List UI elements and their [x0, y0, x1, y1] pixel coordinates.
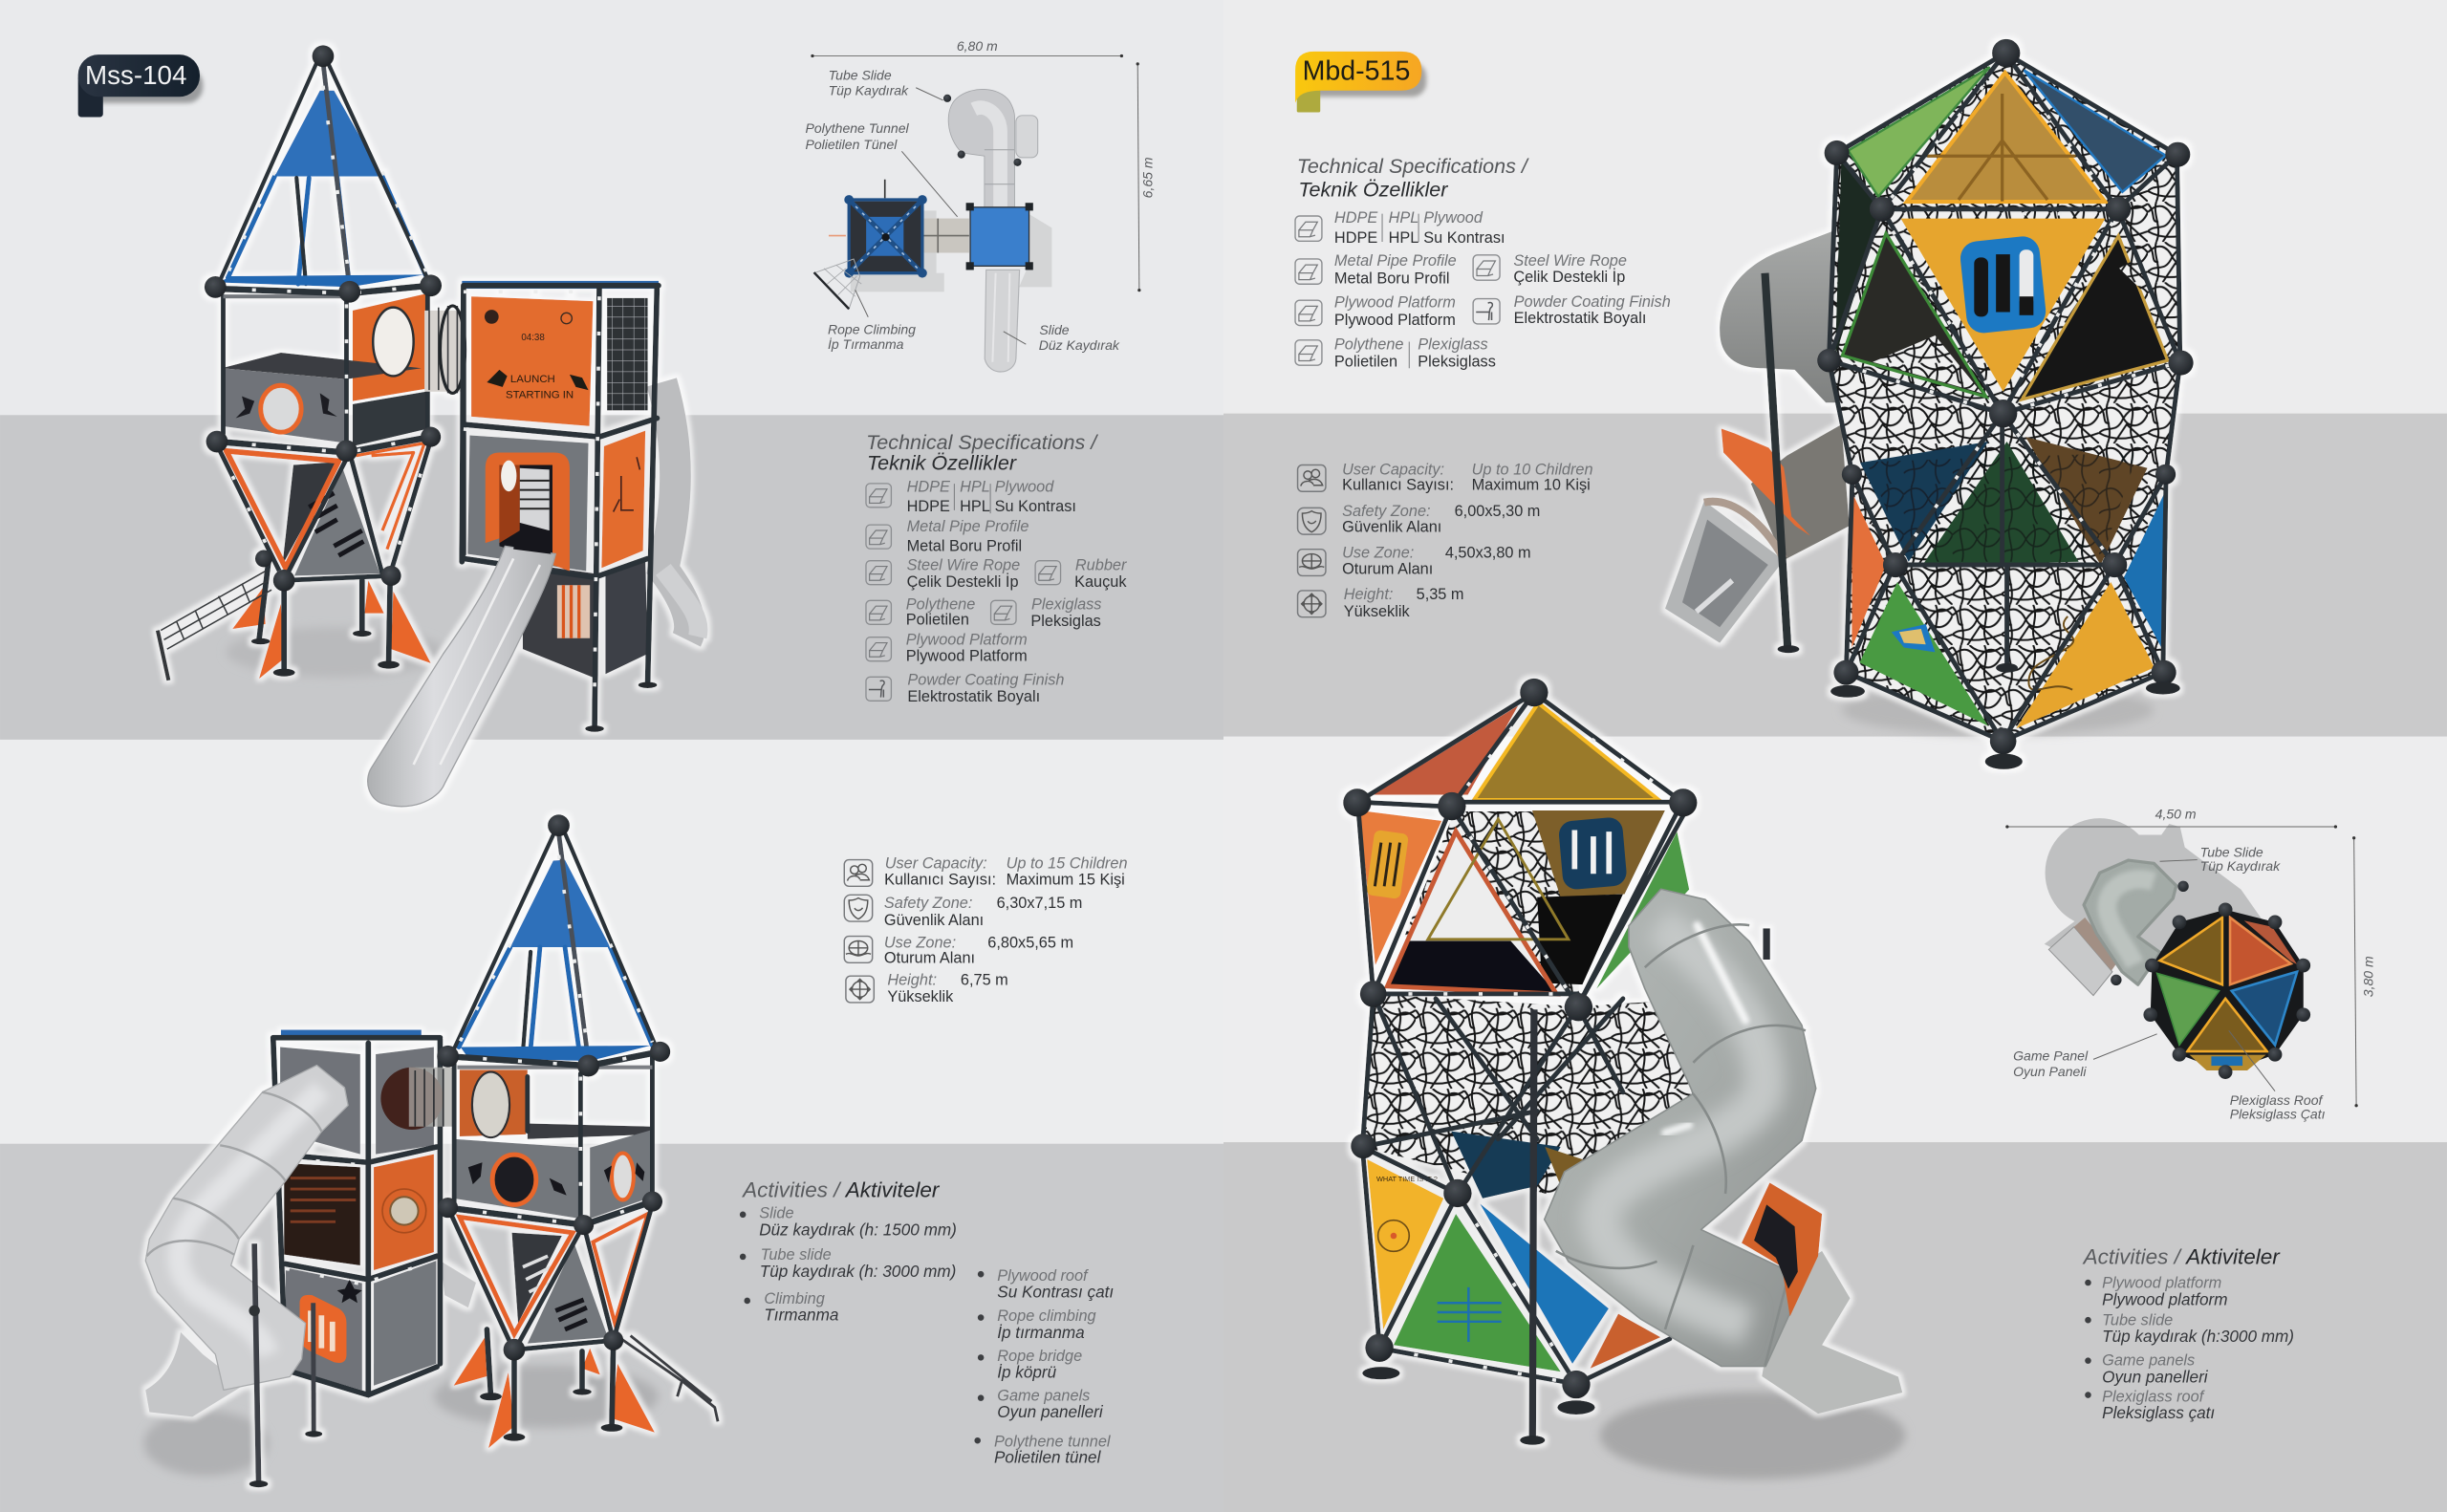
use zone: 4,50x3,80 m	[1445, 545, 1531, 562]
spec: steel wire rope: Steel Wire Rope	[907, 557, 1020, 574]
dome feet	[1362, 1367, 1595, 1415]
plan shadows	[851, 210, 1051, 292]
spec: plexiglass	[1030, 595, 1101, 630]
support post	[1765, 273, 1799, 653]
spec: HDPE HPL plywood: HPL	[1389, 229, 1418, 247]
activities column 2: Rope climbing	[997, 1307, 1096, 1325]
spec: plywood platform: Plywood Platform	[1334, 294, 1456, 312]
activities column 2: Rope bridge	[997, 1348, 1082, 1365]
activities list: Tube slide	[2102, 1311, 2173, 1328]
specifications heading: Technical Specifications /	[1297, 154, 1529, 178]
icon: material	[1473, 255, 1500, 280]
use zone: Use Zone:	[1342, 545, 1414, 562]
dome net	[1362, 994, 1701, 1201]
spec: powder coating: Elektrostatik Boyalı	[1514, 310, 1646, 327]
ground shadow	[227, 627, 444, 678]
plan labels: İp Tırmanma	[828, 336, 904, 352]
spec: polythene	[906, 595, 975, 628]
spec: HDPE HPL plywood: Su Kontrası	[1423, 229, 1505, 247]
bullets column 2	[974, 1271, 984, 1443]
plan labels: Pleksiglass Çatı	[2230, 1107, 2326, 1122]
icon: material	[866, 637, 891, 661]
model badge: Mbd-515	[1295, 52, 1426, 113]
activities column 1: Tırmanma	[764, 1306, 838, 1325]
spec: powder coating: Powder Coating Finish	[907, 672, 1065, 689]
activities heading: Activities / Aktiviteler	[2082, 1244, 2281, 1268]
icon: height	[1298, 591, 1326, 617]
safety zone: Safety Zone:	[1342, 503, 1431, 520]
activities list: Game panels	[2102, 1352, 2195, 1370]
dome panels	[1359, 702, 1689, 1372]
dome nodes	[1817, 39, 2194, 754]
tube slide behind tower	[661, 382, 699, 639]
specifications heading: Teknik Özellikler	[1298, 177, 1448, 201]
ground shadow	[1842, 685, 2154, 735]
icon: user capacity	[1298, 465, 1326, 491]
activities column 2: İp tırmanma	[997, 1323, 1085, 1342]
usage data: Mss-104	[844, 854, 1128, 1005]
orange seat panel	[1742, 1183, 1822, 1316]
spec: polythene plexiglass: Polietilen	[1334, 354, 1397, 371]
icon: safety zone	[844, 895, 873, 921]
spec: steel wire rope	[1513, 252, 1627, 286]
spec: HDPE HPL plywood: Plywood	[995, 478, 1054, 495]
dimension: depth: 6,65 m	[1140, 157, 1156, 198]
usage data: Mbd-515	[1298, 461, 1593, 620]
model badge: Mss-104	[78, 54, 203, 117]
height: Yükseklik	[887, 988, 954, 1005]
spec: powder coating	[1514, 293, 1671, 327]
activities list: Tüp kaydırak (h:3000 mm)	[2102, 1327, 2294, 1346]
activities list: Plywood platform	[2102, 1275, 2221, 1292]
safety zone: Güvenlik Alanı	[1342, 518, 1441, 535]
icon: material	[1295, 340, 1322, 365]
rear tower	[273, 1030, 456, 1395]
spec: polythene plexiglass: Plexiglass	[1418, 336, 1488, 354]
rigging clips	[1829, 59, 2180, 565]
model badge: Mss-104: Mss-104	[85, 60, 186, 90]
icon: powder coating	[866, 677, 891, 701]
orange sign	[1722, 428, 1810, 536]
tower: STARTING IN	[506, 389, 574, 400]
icon: safety zone	[1298, 508, 1326, 534]
rocket cone	[219, 62, 429, 289]
user capacity	[884, 854, 1128, 889]
spec: HDPE HPL plywood: HDPE	[1334, 209, 1378, 227]
rear straight slide	[440, 1261, 476, 1307]
safety zone	[884, 895, 1082, 929]
activities column 2: Su Kontrası çatı	[997, 1283, 1114, 1302]
use zone: Oturum Alanı	[884, 949, 975, 966]
activities column 1: Tube slide	[761, 1246, 832, 1264]
icon: material	[866, 561, 891, 585]
plan labels: Polietilen Tünel	[805, 137, 898, 152]
icon: material	[866, 600, 891, 624]
specifications heading: Teknik Özellikler	[867, 450, 1017, 474]
plan labels: Game Panel	[2013, 1048, 2089, 1063]
dome panels	[1835, 67, 2173, 728]
dome nodes	[1343, 679, 1697, 1398]
use zone: 6,80x5,65 m	[987, 935, 1073, 952]
spec: metal pipe: Metal Pipe Profile	[907, 518, 1029, 535]
plan labels: Slide	[1039, 322, 1070, 337]
icon: powder coating	[1473, 299, 1500, 324]
safety zone: 6,00x5,30 m	[1455, 503, 1540, 520]
icon: user capacity	[844, 860, 873, 886]
slide exit	[1665, 501, 1784, 643]
height: Yükseklik	[1344, 603, 1410, 620]
dimension: width: 6,80 m	[957, 38, 998, 54]
activities column 1: Slide	[759, 1204, 794, 1221]
activities: Mbd-515	[2082, 1244, 2294, 1422]
spec: HDPE HPL plywood	[907, 478, 1076, 515]
product illustration: geodesic climbing dome, view two	[1343, 679, 1905, 1480]
spec: plexiglass: Plexiglass	[1031, 595, 1101, 613]
ground shadow	[1599, 1392, 1905, 1480]
product illustration: rocket play tower, front view	[158, 45, 699, 807]
spec: polythene: Polythene	[906, 595, 975, 613]
user capacity: Maximum 10 Kişi	[1472, 477, 1591, 494]
rear view structure	[145, 814, 718, 1487]
spec: powder coating: Powder Coating Finish	[1514, 293, 1671, 311]
dimension: depth	[1137, 62, 1156, 292]
dome feet	[1830, 663, 2180, 769]
spec: steel wire rope: Çelik Destekli İp	[1513, 268, 1625, 286]
dome two structure	[1343, 679, 1902, 1445]
icon: material	[866, 484, 891, 508]
height	[887, 972, 1008, 1005]
spec: metal pipe: Metal Boru Profil	[1334, 270, 1449, 287]
rocket cabin	[215, 286, 431, 452]
tower: LAUNCH	[510, 374, 555, 385]
activities column 2: Polythene tunnel	[994, 1433, 1111, 1450]
plan labels: Rope Climbing	[828, 321, 916, 336]
plan shadow	[2045, 818, 2263, 967]
dimension: depth	[2352, 836, 2375, 1107]
spec: plywood platform	[906, 631, 1028, 665]
spec: HDPE HPL plywood: HDPE	[907, 498, 950, 515]
straight slide	[368, 538, 555, 807]
spec: polythene plexiglass: Pleksiglass	[1418, 354, 1496, 371]
support post	[1520, 928, 1766, 1445]
plan labels	[805, 67, 1120, 353]
plan platform	[966, 203, 1033, 270]
dimension: depth: 3,80 m	[2360, 956, 2375, 997]
icon: height	[846, 976, 874, 1003]
plan rope ladder	[814, 259, 861, 309]
plan straight slide	[985, 270, 1020, 372]
model badge: Mbd-515: Mbd-515	[1303, 55, 1410, 86]
use zone	[1342, 545, 1531, 577]
plan view: Mbd-515	[2005, 806, 2375, 1122]
height: Height:	[887, 972, 937, 989]
dimension: width: 4,50 m	[2155, 806, 2197, 821]
activities column 1	[759, 1204, 957, 1325]
use zone: Use Zone:	[884, 935, 956, 952]
spec: steel wire rope: Steel Wire Rope	[1513, 252, 1627, 270]
front view structure	[158, 45, 699, 807]
icon: material	[1295, 259, 1322, 284]
plan labels	[2013, 845, 2326, 1122]
plan labels: Polythene Tunnel	[805, 120, 910, 136]
height: 6,75 m	[961, 972, 1008, 989]
spec: polythene: Polietilen	[906, 611, 969, 628]
icon: material	[1295, 300, 1322, 326]
spec: HDPE HPL plywood: HPL	[960, 498, 990, 515]
rear rocket cone	[454, 833, 656, 1061]
safety zone	[1342, 503, 1540, 535]
icon: material	[991, 600, 1016, 624]
activities list: Oyun panelleri	[2102, 1367, 2209, 1386]
user capacity	[1342, 461, 1593, 494]
spec: plexiglass: Pleksiglas	[1030, 613, 1101, 630]
use zone: Oturum Alanı	[1342, 560, 1433, 577]
plan view: Mss-104	[805, 38, 1156, 372]
spec: HDPE HPL plywood: Su Kontrası	[995, 498, 1076, 515]
plan labels: Tube Slide	[2200, 845, 2263, 860]
net overlay on lower panels	[1867, 452, 2138, 562]
tube slide, lower	[1751, 424, 1850, 560]
rocket fins and legs	[232, 562, 431, 679]
height: Height:	[1344, 586, 1393, 603]
plan rocket	[829, 180, 927, 278]
specifications heading: Technical Specifications /	[866, 430, 1098, 454]
spec: metal pipe: Metal Boru Profil	[907, 538, 1022, 555]
activities: Mss-104	[740, 1178, 1114, 1467]
spec: HDPE HPL plywood: Plywood	[1423, 209, 1483, 227]
product illustration: rocket play tower, rear view	[143, 814, 718, 1487]
spec: steel wire rope	[907, 557, 1020, 591]
dome panels: WHAT TIME IS IT ?	[1376, 1175, 1438, 1183]
plan tube slide	[2048, 860, 2189, 996]
spec: HDPE HPL plywood: HDPE	[907, 478, 951, 495]
activities column 2: Game panels	[997, 1388, 1090, 1405]
user capacity: Maximum 15 Kişi	[1007, 872, 1125, 889]
spec: powder coating	[907, 672, 1065, 705]
activities list: Plywood platform	[2102, 1289, 2228, 1308]
rear rocket cabin	[448, 1051, 660, 1225]
spec: HDPE HPL plywood: HPL	[1389, 209, 1418, 227]
spec: plywood platform: Plywood Platform	[906, 631, 1028, 648]
spec: plywood platform	[1334, 294, 1456, 329]
icon: use zone	[1298, 550, 1326, 575]
plan labels: Tüp Kaydırak	[829, 83, 909, 98]
specifications heading	[866, 430, 1098, 474]
dome net	[1829, 54, 2180, 741]
spec: HDPE HPL plywood: HDPE	[1334, 229, 1377, 247]
activities list	[2102, 1275, 2294, 1422]
spec: polythene plexiglass: Polythene	[1334, 336, 1403, 354]
polythene tunnel	[424, 306, 466, 393]
plan labels: Düz Kaydırak	[1039, 337, 1120, 353]
icon: use zone	[844, 937, 873, 962]
activities heading: Activities / Aktiviteler	[741, 1178, 941, 1202]
activities column 1: Climbing	[764, 1290, 825, 1307]
spec: polythene plexiglass	[1334, 336, 1496, 371]
tower: 04:38	[521, 333, 545, 343]
bullets column 1	[740, 1212, 750, 1304]
user capacity: User Capacity:	[1342, 461, 1444, 478]
upper net backdrop	[1404, 811, 1579, 999]
activities column 2: İp köprü	[997, 1363, 1057, 1382]
rear tube slide	[145, 1066, 348, 1416]
dimension: width	[2005, 806, 2337, 829]
user capacity: Kullanıcı Sayısı:	[1342, 477, 1454, 494]
spec: rubber	[1074, 557, 1127, 591]
spec: metal pipe	[907, 518, 1029, 555]
dome frame	[1357, 693, 1685, 1384]
icon: material	[1035, 561, 1061, 585]
large tube slide	[1545, 889, 1816, 1367]
height: 5,35 m	[1417, 586, 1464, 603]
spec: steel wire rope: Çelik Destekli İp	[907, 572, 1019, 591]
plan tube slide	[943, 89, 1038, 212]
activities list: Plexiglass roof	[2102, 1389, 2205, 1406]
user capacity: Kullanıcı Sayısı:	[884, 872, 996, 889]
rear rope bridge	[621, 1336, 718, 1421]
plan labels: Tüp Kaydırak	[2200, 858, 2281, 874]
dimension: width	[811, 38, 1123, 57]
activities column 2: Oyun panelleri	[997, 1402, 1104, 1421]
activities column 1: Düz kaydırak (h: 1500 mm)	[759, 1220, 957, 1240]
spec: rubber: Kauçuk	[1074, 573, 1127, 591]
icon: material	[1295, 216, 1322, 241]
user capacity: User Capacity:	[885, 854, 987, 872]
rocket lower frame	[217, 440, 431, 580]
activities list: Pleksiglass çatı	[2102, 1403, 2215, 1422]
safety zone: 6,30x7,15 m	[997, 895, 1082, 912]
rope climbing ladder	[158, 572, 271, 680]
user capacity: Up to 10 Children	[1472, 461, 1593, 478]
spec: metal pipe	[1334, 252, 1457, 287]
spec: HDPE HPL plywood: HPL	[960, 478, 990, 495]
technical specifications: Mbd-515	[1295, 154, 1671, 371]
spec: HDPE HPL plywood	[1334, 209, 1505, 247]
plan labels: Tube Slide	[829, 67, 892, 82]
technical specifications: Mss-104	[866, 430, 1127, 705]
spec: metal pipe: Metal Pipe Profile	[1334, 252, 1457, 270]
rear rocket fins and legs	[454, 1329, 655, 1448]
icon: material	[866, 525, 891, 549]
plan dome	[2143, 902, 2310, 1079]
rocket nodes	[205, 45, 442, 592]
plan tunnel	[920, 219, 969, 252]
plan labels: Oyun Paneli	[2013, 1064, 2087, 1079]
rear rocket lower frame	[449, 1204, 652, 1350]
spec: plywood platform: Plywood Platform	[906, 648, 1028, 665]
ground shadows	[143, 1366, 659, 1476]
use zone	[884, 935, 1073, 966]
rigging clips	[1374, 699, 1682, 1384]
spec: powder coating: Elektrostatik Boyalı	[907, 688, 1040, 705]
activities column 1: Tüp kaydırak (h: 3000 mm)	[760, 1262, 956, 1281]
spec: plywood platform: Plywood Platform	[1334, 312, 1456, 329]
user capacity: Up to 15 Children	[1007, 854, 1128, 872]
spec: rubber: Rubber	[1075, 557, 1127, 574]
product illustration: geodesic climbing dome, view one	[1665, 39, 2194, 769]
bullets	[2085, 1280, 2091, 1398]
plan labels: Plexiglass Roof	[2230, 1092, 2325, 1108]
activities column 2	[994, 1267, 1114, 1467]
specifications heading	[1297, 154, 1529, 201]
safety zone: Güvenlik Alanı	[884, 912, 984, 929]
tube slide exit	[1762, 1251, 1902, 1414]
rear rocket nodes	[437, 814, 670, 1361]
tower	[462, 281, 659, 732]
rear posts	[249, 1243, 322, 1487]
height	[1344, 586, 1464, 620]
activities column 2: Polietilen tünel	[994, 1448, 1102, 1467]
activities column 2: Plywood roof	[997, 1267, 1089, 1285]
dome one structure	[1665, 39, 2194, 769]
tube slide, upper	[1720, 227, 1865, 402]
dome frame	[1829, 54, 2180, 741]
safety zone: Safety Zone:	[884, 895, 972, 912]
